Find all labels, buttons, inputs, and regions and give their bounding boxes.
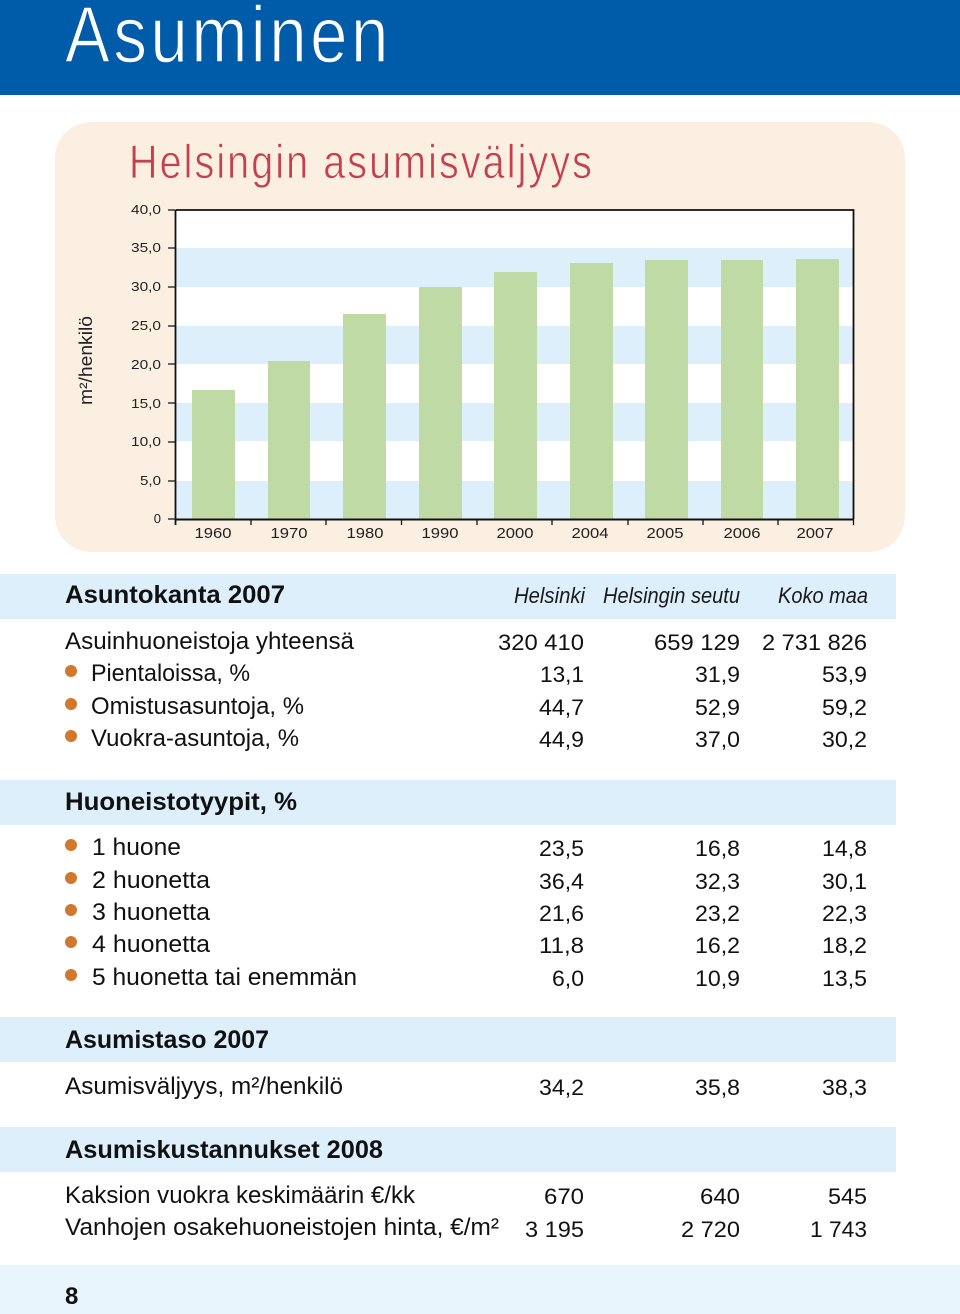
x axis years	[194, 525, 834, 542]
section: Asuntokanta 2007: Helsinki	[514, 583, 586, 608]
section: Huoneistotyypit: 4 huonetta	[92, 931, 211, 958]
section: Huoneistotyypit: 18,2	[822, 933, 867, 958]
chart title: Helsingin asumisväljyys	[129, 137, 592, 189]
x axis years: 1980	[346, 525, 384, 542]
section: Asumistaso 2007: 38,3	[822, 1075, 867, 1100]
x axis years: 2007	[796, 525, 834, 542]
section: Asuntokanta 2007: 44,9	[539, 727, 584, 752]
y axis values: 10,0	[131, 434, 161, 449]
section: Asuntokanta 2007: 44,7	[539, 695, 584, 720]
y axis values: 5,0	[140, 473, 161, 488]
section: Asuntokanta 2007: Pientaloissa, %	[91, 660, 250, 687]
bar chart	[168, 210, 854, 525]
y axis values: 15,0	[131, 396, 161, 411]
y axis values: 0	[154, 511, 161, 526]
section: Huoneistotyypit: Huoneistotyypit, %	[65, 788, 297, 816]
x axis years: 1990	[422, 525, 458, 542]
section: Huoneistotyypit: 32,3	[695, 869, 740, 894]
section: Asumiskustannukset 2008	[0, 1127, 896, 1242]
y axis values	[131, 202, 161, 526]
section: Asumiskustannukset 2008: 640	[700, 1184, 740, 1209]
section: Asuntokanta 2007: Omistusasuntoja, %	[91, 693, 304, 720]
section: Asumistaso 2007: Asumisväljyys, m²/henkilö	[65, 1073, 343, 1100]
section: Asuntokanta 2007: Asuntokanta 2007	[65, 581, 285, 609]
section: Asuntokanta 2007: Helsingin seutu	[603, 583, 740, 608]
section: Huoneistotyypit: 2 huonetta	[92, 867, 211, 894]
section: Asumistaso 2007: 35,8	[695, 1075, 740, 1100]
section: Asuntokanta 2007: 13,1	[540, 662, 584, 687]
section: Asumiskustannukset 2008: 2 720	[681, 1217, 740, 1242]
y axis values: 25,0	[131, 318, 161, 333]
section: Huoneistotyypit: 5 huonetta tai enemmän	[92, 964, 357, 991]
section: Asuntokanta 2007: Vuokra-asuntoja, %	[91, 725, 299, 752]
header banner	[0, 0, 960, 95]
section: Huoneistotyypit: 30,1	[822, 869, 867, 894]
footer band with page number	[0, 1265, 960, 1314]
y axis values: 30,0	[131, 279, 161, 294]
section: Huoneistotyypit: 1 huone	[92, 834, 181, 861]
section: Asuntokanta 2007: 59,2	[822, 695, 867, 720]
y axis values: 20,0	[131, 357, 161, 372]
footer band with page number: 8	[65, 1283, 78, 1310]
section: Huoneistotyypit: 13,5	[822, 966, 867, 991]
section: Huoneistotyypit: 3 huonetta	[92, 899, 211, 926]
section: Asuntokanta 2007: Koko maa	[778, 583, 868, 608]
section: Asuntokanta 2007: 52,9	[695, 695, 740, 720]
section: Huoneistotyypit: 23,5	[539, 836, 584, 861]
x axis years: 2005	[646, 525, 684, 542]
section: Huoneistotyypit	[0, 780, 896, 991]
section: Asuntokanta 2007: 37,0	[695, 727, 740, 752]
section: Asuntokanta 2007: 30,2	[822, 727, 867, 752]
section: Asumiskustannukset 2008: 670	[544, 1184, 584, 1209]
section: Huoneistotyypit: 11,8	[539, 933, 584, 958]
section: Asumistaso 2007	[0, 1017, 896, 1100]
section: Huoneistotyypit: 36,4	[539, 869, 584, 894]
section: Asumistaso 2007: 34,2	[539, 1075, 584, 1100]
section: Huoneistotyypit: 14,8	[822, 836, 867, 861]
section: Huoneistotyypit: 16,8	[695, 836, 740, 861]
y axis values: 35,0	[131, 240, 161, 255]
section: Huoneistotyypit: 21,6	[539, 901, 584, 926]
x axis years: 2006	[724, 525, 760, 542]
section: Huoneistotyypit: 6,0	[552, 966, 584, 991]
x axis years: 1960	[194, 525, 232, 542]
section: Asuntokanta 2007	[0, 574, 896, 752]
section: Asumistaso 2007: Asumistaso 2007	[65, 1026, 269, 1054]
section: Asuntokanta 2007: 2 731 826	[762, 630, 867, 655]
section: Huoneistotyypit: 10,9	[695, 966, 740, 991]
panel: housing space chart	[55, 122, 905, 552]
x axis years: 1970	[270, 525, 308, 542]
section: Asuntokanta 2007: 31,9	[695, 662, 740, 687]
x axis years: 2000	[496, 525, 534, 542]
section: Asumiskustannukset 2008: Vanhojen osakehuoneistojen hinta, €/m²	[65, 1214, 499, 1241]
x axis years: 2004	[572, 525, 608, 542]
section: Huoneistotyypit: 22,3	[822, 901, 867, 926]
section: Asumiskustannukset 2008: 545	[828, 1184, 867, 1209]
section: Asuntokanta 2007: 53,9	[822, 662, 867, 687]
section: Asuntokanta 2007: 320 410	[498, 630, 584, 655]
y axis values: 40,0	[131, 202, 161, 217]
section: Asumiskustannukset 2008: Asumiskustannukset 2008	[65, 1136, 383, 1164]
section: Asuntokanta 2007: Asuinhuoneistoja yhteensä	[65, 628, 355, 655]
section: Asuntokanta 2007: 659 129	[654, 630, 740, 655]
section: Asumiskustannukset 2008: 1 743	[810, 1217, 867, 1242]
section: Huoneistotyypit: 23,2	[695, 901, 740, 926]
y axis label: m²/henkilö	[76, 316, 96, 405]
section: Asumiskustannukset 2008: Kaksion vuokra keskimäärin €/kk	[65, 1182, 416, 1209]
section: Huoneistotyypit: 16,2	[695, 933, 740, 958]
section: Asumiskustannukset 2008: 3 195	[525, 1217, 584, 1242]
